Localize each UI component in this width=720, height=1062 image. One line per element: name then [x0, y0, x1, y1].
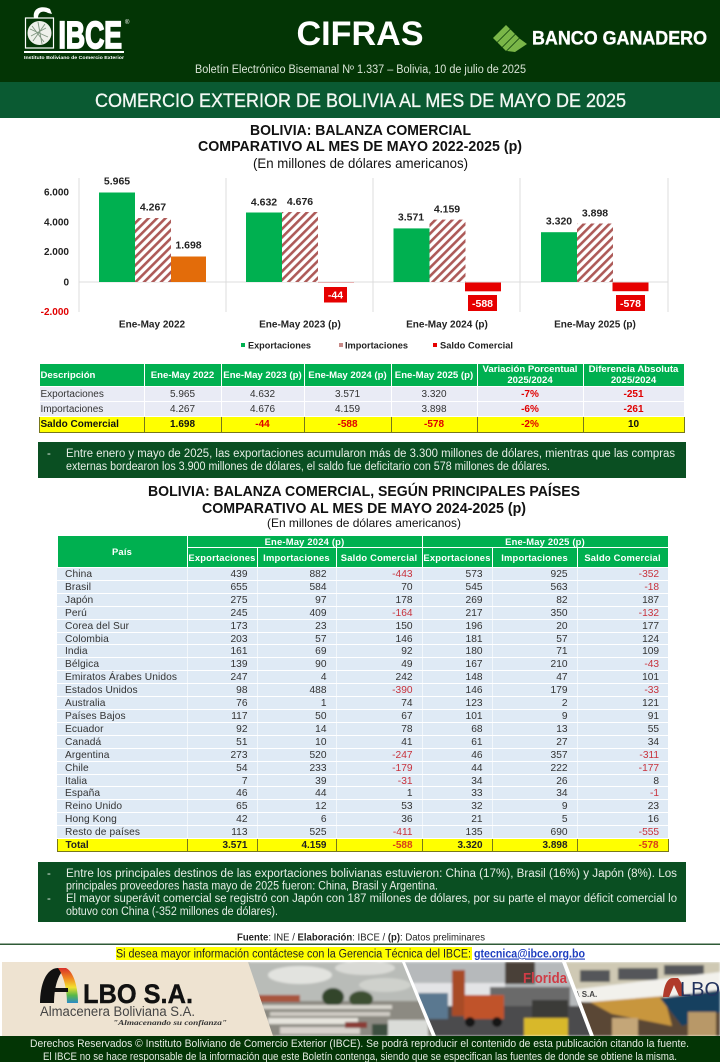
table: balanza comercial por país: 36 [401, 814, 413, 825]
contact line: Si desea mayor información contáctese con la Gerencia Técnica del IBCE: [116, 948, 471, 960]
legend: Exportaciones [248, 340, 311, 352]
table: balanza comercial summary: 4.676 [250, 404, 275, 415]
table: balanza comercial summary: 3.571 [335, 389, 360, 400]
table: balanza comercial por país: Colombia [65, 634, 109, 645]
logo: IBCE: IBCE [58, 15, 122, 57]
table: balanza comercial summary: Ene-May 2024 (p) [308, 370, 387, 380]
table: balanza comercial por país: Japón [65, 595, 93, 606]
table: balanza comercial por país: 177 [642, 621, 659, 632]
title: CIFRAS: CIFRAS [296, 15, 424, 53]
table: balanza comercial summary: 4.267 [170, 404, 195, 415]
table: balanza comercial por país: 78 [401, 724, 413, 735]
bar chart: balanza comercial [41, 176, 668, 352]
table: balanza comercial summary: 3.898 [421, 404, 447, 415]
table: balanza comercial por país: 12 [315, 801, 326, 812]
legend: Saldo Comercial [440, 340, 513, 352]
table: balanza comercial por país: 97 [315, 595, 326, 606]
table: balanza comercial summary: 4.632 [250, 389, 275, 400]
table: balanza comercial por país: Exportaciones [423, 552, 491, 563]
table: balanza comercial por país: 13 [556, 724, 568, 735]
category labels: Ene-May 2025 (p) [554, 320, 636, 330]
bars: Ene-May 2024 [394, 220, 501, 291]
table: balanza comercial por país: 545 [466, 582, 483, 593]
table: balanza comercial por país: 3.898 [542, 840, 568, 851]
table: balanza comercial por país: Argentina [65, 750, 110, 761]
header band [0, 0, 720, 82]
table: balanza comercial por país: 124 [642, 634, 659, 645]
table: balanza comercial por país: 6 [321, 814, 326, 825]
table: balanza comercial por país: -43 [644, 659, 659, 670]
table: balanza comercial summary: 5.965 [170, 389, 195, 400]
source line: Fuente: INE / Elaboración: IBCE / (p): Datos preliminares [237, 932, 485, 944]
chart title: COMPARATIVO AL MES DE MAYO 2022-2025 (p) [198, 138, 522, 155]
table: balanza comercial summary: -251 [623, 389, 644, 400]
table: balanza comercial por país: Importaciones [501, 552, 568, 563]
subtitle: Boletín Electrónico Bisemanal Nº 1.337 – Bolivia, 10 de julio de 2025 [195, 64, 526, 76]
table: balanza comercial por país: Bélgica [65, 659, 99, 670]
table: balanza comercial por país: 233 [310, 763, 326, 774]
table: balanza comercial summary: 1.698 [170, 419, 195, 430]
table: balanza comercial por país: 34 [471, 776, 483, 786]
table: balanza comercial por país: 74 [401, 698, 413, 709]
table: balanza comercial por país: 123 [466, 698, 483, 709]
table: balanza comercial por país: Total [66, 840, 89, 851]
table: balanza comercial por país: 150 [396, 621, 413, 632]
data labels: 3.571 [398, 212, 424, 224]
table: balanza comercial por país: 247 [230, 672, 248, 683]
data labels: 4.676 [287, 196, 313, 208]
category labels [119, 320, 636, 330]
table: balanza comercial por país: 76 [236, 698, 248, 709]
table: balanza comercial por país: 91 [648, 711, 659, 722]
table: balanza comercial summary: -588 [337, 419, 358, 430]
table: balanza comercial por país: 34 [648, 737, 659, 748]
table: balanza comercial por país: India [65, 646, 88, 657]
table: balanza comercial summary: 10 [628, 419, 639, 430]
table: balanza comercial por país: 53 [401, 801, 413, 812]
table: balanza comercial por país: 101 [642, 672, 659, 683]
table: balanza comercial por país: 39 [315, 776, 326, 786]
table: balanza comercial por país: -132 [639, 608, 659, 619]
table: balanza comercial por país: -164 [392, 608, 413, 619]
divider [0, 944, 720, 945]
table: balanza comercial por país: 357 [551, 750, 568, 761]
table: balanza comercial por país: 9 [562, 801, 568, 812]
table: balanza comercial por país: -390 [392, 685, 413, 696]
table: balanza comercial summary: -44 [255, 419, 270, 430]
table: balanza comercial por país: 44 [471, 763, 483, 774]
photo: warehouse: LBO [680, 979, 720, 1001]
table title: principales países [148, 482, 580, 530]
table: balanza comercial summary: Variación Porcentual [483, 364, 577, 375]
chart title [198, 122, 522, 171]
table: balanza comercial por país: 32 [471, 801, 483, 812]
table: balanza comercial por país: 573 [466, 569, 483, 580]
table: balanza comercial por país: 181 [466, 634, 483, 645]
table: balanza comercial por país: 68 [471, 724, 483, 735]
photo: forklifts and aircraft [400, 962, 600, 1036]
table: balanza comercial por país: 167 [466, 659, 483, 670]
table: balanza comercial por país: 925 [551, 569, 568, 580]
contact line: gtecnica@ibce.org.bo [474, 948, 585, 960]
table: balanza comercial por país: 203 [230, 634, 248, 645]
table: balanza comercial por país: 42 [236, 814, 248, 825]
table: balanza comercial por país: 50 [315, 711, 326, 722]
data labels: 3.320 [546, 216, 572, 228]
table: balanza comercial por país: 690 [551, 827, 568, 838]
negative value labels [324, 287, 645, 311]
table: balanza comercial por país: 21 [471, 814, 483, 825]
table: balanza comercial por país [57, 536, 669, 852]
table: balanza comercial summary: Importaciones [40, 404, 103, 415]
table: balanza comercial por país: Australia [65, 698, 106, 709]
table: balanza comercial por país: 520 [310, 750, 326, 761]
table: balanza comercial por país: País [112, 546, 132, 557]
chart title: BOLIVIA: BALANZA COMERCIAL [250, 122, 471, 139]
bars: Ene-May 2023 [246, 212, 354, 283]
table: balanza comercial por país: -588 [393, 840, 413, 851]
table: balanza comercial por país: 71 [556, 646, 568, 657]
beige logo panel [2, 962, 276, 1036]
table: balanza comercial por país: 135 [466, 827, 483, 838]
table: balanza comercial por país: 210 [551, 659, 568, 670]
table: balanza comercial por país: 41 [401, 737, 413, 748]
table: balanza comercial por país: 245 [230, 608, 248, 619]
logo: IBCE: Instituto Boliviano de Comercio Exterior [24, 55, 124, 61]
table: balanza comercial por país: 65 [236, 801, 248, 812]
table title: principales países: (En millones de dólares americanos) [267, 516, 461, 530]
table: balanza comercial summary: -261 [623, 404, 644, 415]
table: balanza comercial por país: Exportaciones [188, 552, 256, 563]
table: balanza comercial por país: 10 [315, 737, 326, 748]
table: balanza comercial por país: 882 [310, 569, 326, 580]
y axis labels: 4.000 [44, 218, 69, 228]
table: balanza comercial por país: 3.571 [222, 840, 248, 851]
table: balanza comercial por país: 54 [236, 763, 248, 774]
table: balanza comercial por país: 55 [648, 724, 659, 735]
table: balanza comercial por país: 9 [562, 711, 568, 722]
table: balanza comercial por país: 82 [556, 595, 568, 606]
data labels: 4.267 [140, 202, 166, 214]
table: balanza comercial por país: 488 [310, 685, 326, 696]
table: balanza comercial por país: 525 [310, 827, 326, 838]
table: balanza comercial por país: 269 [466, 595, 483, 606]
table: balanza comercial por país: 14 [315, 724, 326, 735]
logo: IBCE [24, 7, 130, 61]
y axis labels: 2.000 [44, 247, 69, 258]
table: balanza comercial por país: 2 [562, 698, 568, 709]
table: balanza comercial por país: -1 [650, 788, 659, 799]
table: balanza comercial por país: Emiratos Árabes Unidos [65, 672, 177, 683]
table: balanza comercial por país: Ene-May 2025 (p) [505, 536, 585, 547]
table: balanza comercial por país: 161 [230, 646, 248, 657]
chart title: (En millones de dólares americanos) [253, 155, 468, 171]
table: balanza comercial por país: 70 [401, 582, 413, 593]
table: balanza comercial por país: -411 [393, 827, 413, 838]
table: balanza comercial por país: 139 [230, 659, 248, 670]
banner heading [0, 82, 720, 118]
note box: países: El mayor superávit comercial se registró con Japón con 187 millones de dólares, por su parte el mayor déficit comercial lo [66, 893, 677, 905]
table: balanza comercial por país: 46 [471, 750, 483, 761]
table: balanza comercial por país: 33 [471, 788, 483, 799]
table: balanza comercial por país: 655 [230, 582, 248, 593]
table: balanza comercial por país: 178 [396, 595, 413, 606]
table: balanza comercial por país: 173 [230, 621, 248, 632]
table: balanza comercial por país: 242 [396, 672, 413, 683]
table: balanza comercial por país: 23 [315, 621, 326, 632]
table: balanza comercial por país: 47 [556, 672, 568, 683]
table: balanza comercial por país: 23 [648, 801, 659, 812]
data labels: 4.632 [251, 196, 277, 208]
table: balanza comercial por país: 275 [230, 595, 248, 606]
table: balanza comercial por país: 20 [556, 621, 568, 632]
table: balanza comercial por país: 46 [236, 788, 248, 799]
table: balanza comercial por país: Saldo Comercial [341, 552, 417, 563]
note box: balanza [38, 442, 686, 478]
table: balanza comercial por país: 49 [401, 659, 413, 670]
table: balanza comercial por país: -177 [639, 763, 659, 774]
table: balanza comercial por país: Perú [65, 608, 87, 619]
table: balanza comercial por país: Países Bajos [65, 711, 126, 722]
table: balanza comercial por país: 4.159 [301, 840, 326, 851]
table: balanza comercial summary: Ene-May 2025 (p) [395, 370, 473, 380]
table: balanza comercial por país: -31 [398, 776, 413, 786]
table: balanza comercial por país: 196 [466, 621, 483, 632]
table: balanza comercial por país: España [65, 788, 100, 799]
table: balanza comercial por país: Importaciones [263, 552, 330, 563]
table: balanza comercial por país: Canadá [65, 737, 101, 748]
table: balanza comercial por país: 187 [642, 595, 659, 606]
negative value labels: -44 [328, 290, 343, 302]
note box: países: obtuvo con China (-352 millones de dólares). [66, 906, 278, 918]
logo letter A [40, 968, 78, 1003]
table: balanza comercial summary: -578 [424, 419, 444, 430]
legend [241, 340, 513, 352]
data labels: 1.698 [175, 240, 202, 252]
table: balanza comercial por país: -247 [392, 750, 413, 761]
table: balanza comercial summary: Saldo Comercial [40, 419, 119, 430]
table: balanza comercial por país: Ecuador [65, 724, 104, 735]
negative value labels: -588 [472, 298, 493, 310]
category labels: Ene-May 2023 (p) [259, 320, 341, 330]
note box: países [38, 862, 686, 922]
table: balanza comercial por país: Hong Kong [65, 814, 117, 825]
data labels: 3.898 [582, 208, 608, 220]
table: balanza comercial por país: 146 [396, 634, 413, 645]
table: balanza comercial summary: Diferencia Absoluta [589, 364, 678, 375]
y axis labels: 6.000 [44, 188, 69, 198]
banner heading: COMERCIO EXTERIOR DE BOLIVIA AL MES DE MAYO DE 2025 [95, 91, 626, 112]
y axis labels: -2.000 [41, 307, 69, 318]
table: balanza comercial por país: 222 [551, 763, 568, 774]
table: balanza comercial por país: 69 [315, 646, 326, 657]
table: balanza comercial por país: 217 [466, 608, 483, 619]
table: balanza comercial por país: 92 [401, 646, 413, 657]
table: balanza comercial por país: 57 [315, 634, 326, 645]
table: balanza comercial summary: Exportaciones [40, 389, 104, 400]
table: balanza comercial summary: Descripción [40, 370, 95, 380]
table: balanza comercial por país: 439 [230, 569, 248, 580]
table: balanza comercial por país: -352 [639, 569, 659, 580]
data labels: 4.159 [434, 204, 460, 216]
bars: Ene-May 2025 [541, 224, 648, 291]
table: balanza comercial por país: Estados Unidos [65, 685, 138, 696]
logo: Banco Ganadero: BANCO GANADERO [532, 28, 707, 50]
table: balanza comercial por país: 98 [236, 685, 248, 696]
table: balanza comercial por país: 179 [551, 685, 568, 696]
photo: parking lot [240, 961, 440, 1036]
table: balanza comercial por país: 16 [648, 814, 659, 825]
table: balanza comercial por país: -555 [639, 827, 659, 838]
table: balanza comercial summary: Ene-May 2022 [151, 370, 214, 380]
table: balanza comercial por país: 121 [642, 698, 659, 709]
note box: países: - [47, 893, 51, 905]
note box: países: Entre los principales destinos de las exportaciones bolivianas estuvieron: China (17%), Brasil (16%) y Japón (8%). Los [66, 868, 677, 880]
table: balanza comercial por país: 146 [466, 685, 483, 696]
table: balanza comercial summary: 4.159 [335, 404, 360, 415]
table: balanza comercial summary: 3.320 [421, 389, 447, 400]
table: balanza comercial por país: 34 [556, 788, 568, 799]
table: balanza comercial por país: 44 [315, 788, 326, 799]
data labels [104, 176, 608, 252]
table: balanza comercial por país: 26 [556, 776, 568, 786]
note box: países: - [47, 868, 51, 880]
data labels: 5.965 [104, 176, 130, 188]
table: balanza comercial summary: -7% [521, 389, 539, 400]
table: balanza comercial summary: 2025/2024 [507, 375, 553, 386]
table: balanza comercial por país: 113 [231, 827, 248, 838]
table: balanza comercial por país: Reino Unido [65, 801, 122, 812]
table: balanza comercial por país: 101 [466, 711, 483, 722]
table: balanza comercial por país: 180 [466, 646, 483, 657]
table: balanza comercial por país: 563 [551, 582, 568, 593]
negative value labels: -578 [620, 298, 641, 310]
table: balanza comercial por país: -179 [392, 763, 413, 774]
table: balanza comercial por país: Ene-May 2024 (p) [265, 536, 344, 547]
table: balanza comercial por país: 3.320 [458, 840, 483, 851]
table: balanza comercial por país: 67 [401, 711, 413, 722]
note box: balanza: Entre enero y mayo de 2025, las exportaciones acumularon más de 3.300 millones de dólares, mientras que las compras [66, 448, 675, 460]
table: balanza comercial summary: -2% [521, 419, 539, 430]
table: balanza comercial por país: -18 [644, 582, 659, 593]
logo: Banco Ganadero [493, 25, 707, 52]
table: balanza comercial por país: -311 [639, 750, 659, 761]
table: balanza comercial por país: Saldo Comercial [584, 552, 661, 563]
table: balanza comercial por país: Resto de países [65, 827, 140, 838]
table: balanza comercial summary: -6% [521, 404, 539, 415]
table: balanza comercial por país: Italia [65, 776, 87, 786]
table: balanza comercial por país: 92 [236, 724, 248, 735]
table: balanza comercial por país: 1 [407, 788, 413, 799]
logo wordmark: LBO S.A. [83, 979, 193, 1009]
table: balanza comercial por país: 51 [236, 737, 248, 748]
footer band: Derechos Reservados © Instituto Boliviano de Comercio Exterior (IBCE). Se podrá reproducir el contenido de esta publicación citando la fuente. [30, 1038, 689, 1050]
table: balanza comercial por país: 27 [556, 737, 568, 748]
table: balanza comercial por país: 109 [642, 646, 659, 657]
table: balanza comercial por país: Chile [65, 763, 89, 774]
table title: principales países: COMPARATIVO AL MES DE MAYO 2024-2025 (p) [202, 500, 526, 517]
table: balanza comercial por país: Corea del Sur [65, 621, 129, 632]
advertising banner: ALBO: Almacenera Boliviana S.A. [40, 1004, 195, 1019]
note box: balanza: - [47, 448, 51, 460]
logo: IBCE: ® [125, 19, 130, 26]
table: balanza comercial summary [39, 364, 685, 433]
table: balanza comercial por país: 409 [310, 608, 326, 619]
photo: forklifts and aircraft: Florida [523, 970, 568, 987]
table: balanza comercial summary: Ene-May 2023 (p) [223, 370, 302, 380]
advertising banner: ALBO [0, 961, 720, 1036]
table: balanza comercial por país: China [65, 569, 92, 580]
note box: países: principales proveedores hasta mayo de 2025 fueron: China, Brasil y Argentina. [66, 880, 438, 892]
table: balanza comercial summary: 2025/2024 [611, 375, 656, 386]
table: balanza comercial por país: 4 [321, 672, 326, 683]
table: balanza comercial por país: 273 [230, 750, 248, 761]
table: balanza comercial por país: 584 [310, 582, 326, 593]
legend: Importaciones [345, 340, 408, 352]
y axis labels [41, 188, 69, 318]
footer band [0, 1036, 720, 1062]
category labels: Ene-May 2022 [119, 320, 186, 330]
table: balanza comercial por país: 5 [562, 814, 568, 825]
table: balanza comercial por país: 90 [315, 659, 326, 670]
table: balanza comercial por país: -578 [639, 840, 659, 851]
advertising banner: ALBO: "Almacenando su confianza" [113, 1018, 227, 1027]
table: balanza comercial por país: -33 [644, 685, 659, 696]
table: balanza comercial por país: 148 [466, 672, 483, 683]
category labels: Ene-May 2024 (p) [406, 320, 488, 330]
photo: warehouse: A S.A. [574, 990, 597, 999]
table: balanza comercial por país: 57 [556, 634, 568, 645]
table: balanza comercial por país: 117 [231, 711, 248, 722]
table title: principales países: BOLIVIA: BALANZA COMERCIAL, SEGÚN PRINCIPALES PAÍSES [148, 482, 580, 500]
table: balanza comercial por país: 1 [321, 698, 326, 709]
note box: balanza: externas bordearon los 3.900 millones de dólares, el saldo fue deficitario con 578 millones de dólares. [66, 461, 550, 473]
table: balanza comercial por país: Brasil [65, 582, 91, 593]
y axis labels: 0 [63, 278, 69, 288]
table: balanza comercial por país: 7 [242, 776, 248, 786]
table: balanza comercial por país: 61 [471, 737, 483, 748]
table: balanza comercial por país: -443 [392, 569, 413, 580]
photo: warehouse [560, 962, 720, 1036]
table: balanza comercial por país: 8 [653, 776, 659, 786]
bars: Ene-May 2022 [99, 192, 206, 282]
table: balanza comercial por país: 350 [551, 608, 568, 619]
